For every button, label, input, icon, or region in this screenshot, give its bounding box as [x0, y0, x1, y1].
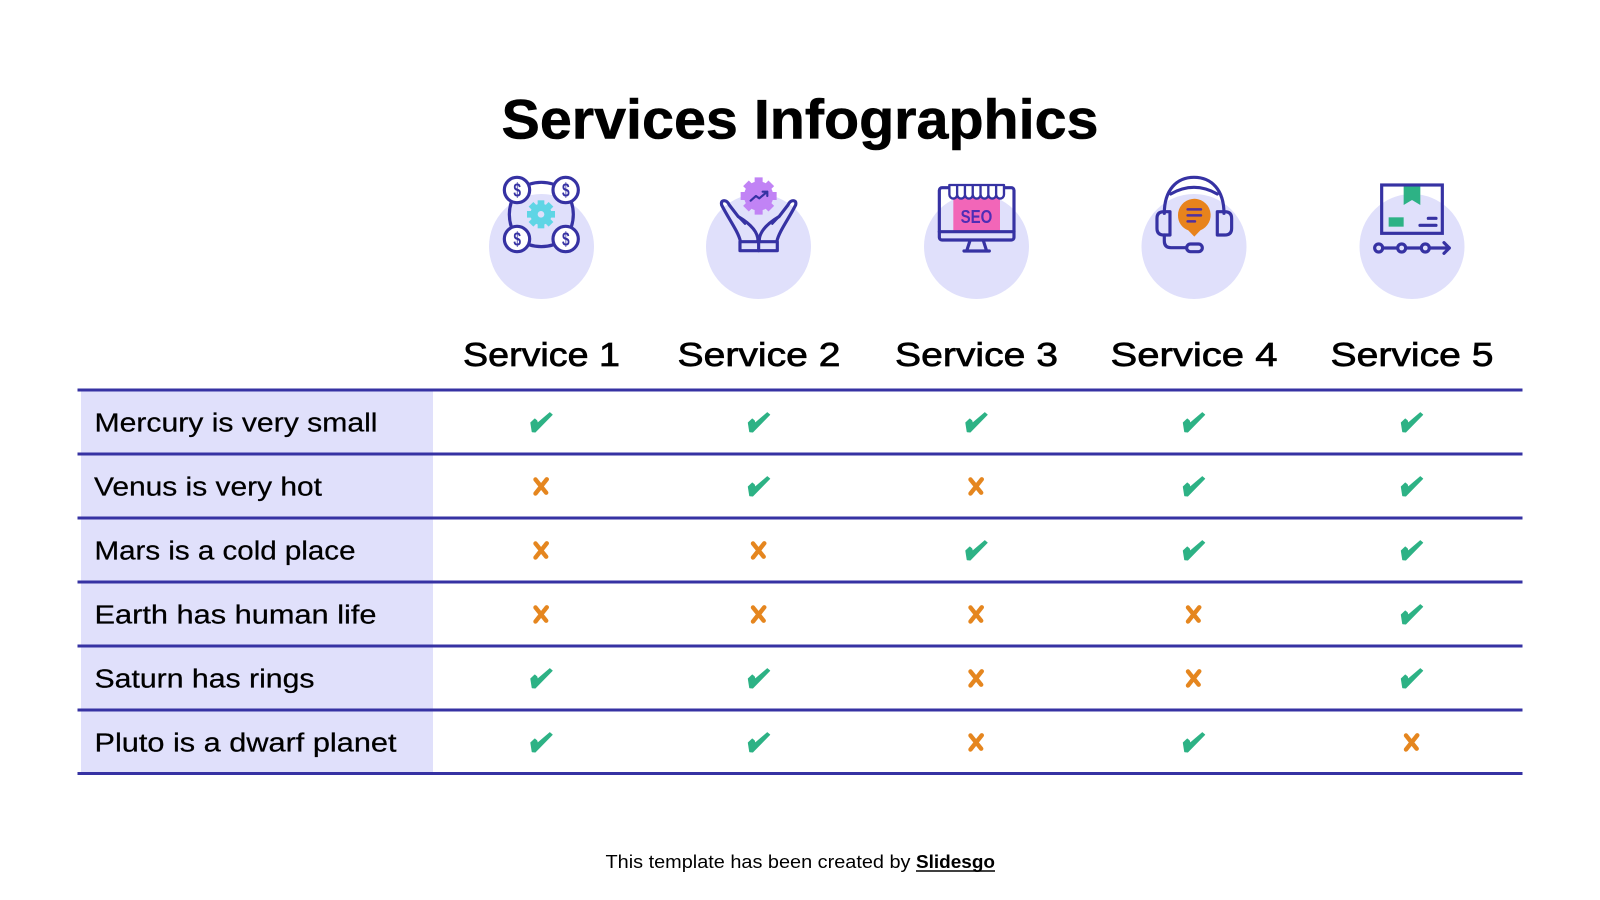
- column headings: Service 2: [678, 337, 840, 374]
- row labels: Pluto is a dwarf planet: [94, 730, 396, 758]
- column headings: Service 1: [463, 337, 620, 374]
- row labels: Saturn has rings: [94, 666, 314, 694]
- row 4 marks: [536, 605, 1423, 624]
- icon: hands holding gear: [706, 177, 811, 299]
- footer credit: Slidesgo: [916, 852, 995, 872]
- row 5 marks: [531, 669, 1423, 688]
- column headings: [463, 337, 1494, 374]
- row labels: Mercury is very small: [94, 410, 378, 438]
- column headings: Service 3: [895, 337, 1058, 374]
- row 3 marks: [536, 541, 1423, 560]
- row 1 marks: [531, 413, 1423, 432]
- title: Services Infographics: [502, 88, 1098, 150]
- icon: money gear: $: [513, 230, 521, 251]
- icon: money gear: [489, 177, 594, 299]
- icon: money gear: $: [562, 181, 570, 202]
- row labels: Venus is very hot: [94, 474, 322, 502]
- column headings: Service 5: [1330, 337, 1494, 374]
- icon: package tracking: [1360, 185, 1464, 299]
- row labels: Earth has human life: [94, 602, 376, 630]
- row 2 marks: [536, 477, 1423, 496]
- row 6 marks: [531, 733, 1417, 752]
- icon: money gear: $: [513, 181, 521, 202]
- column headings: Service 4: [1110, 337, 1278, 374]
- icon: money gear: $: [562, 230, 570, 251]
- icon: SEO monitor: SEO: [961, 206, 992, 227]
- table rules: [78, 390, 1522, 774]
- icon: support headset: [1142, 177, 1246, 299]
- icon: SEO monitor: [924, 185, 1029, 299]
- footer credit: This template has been created by: [606, 852, 910, 872]
- row label panel: [81, 390, 433, 774]
- row labels: Mars is a cold place: [94, 538, 356, 566]
- row labels: [94, 410, 396, 758]
